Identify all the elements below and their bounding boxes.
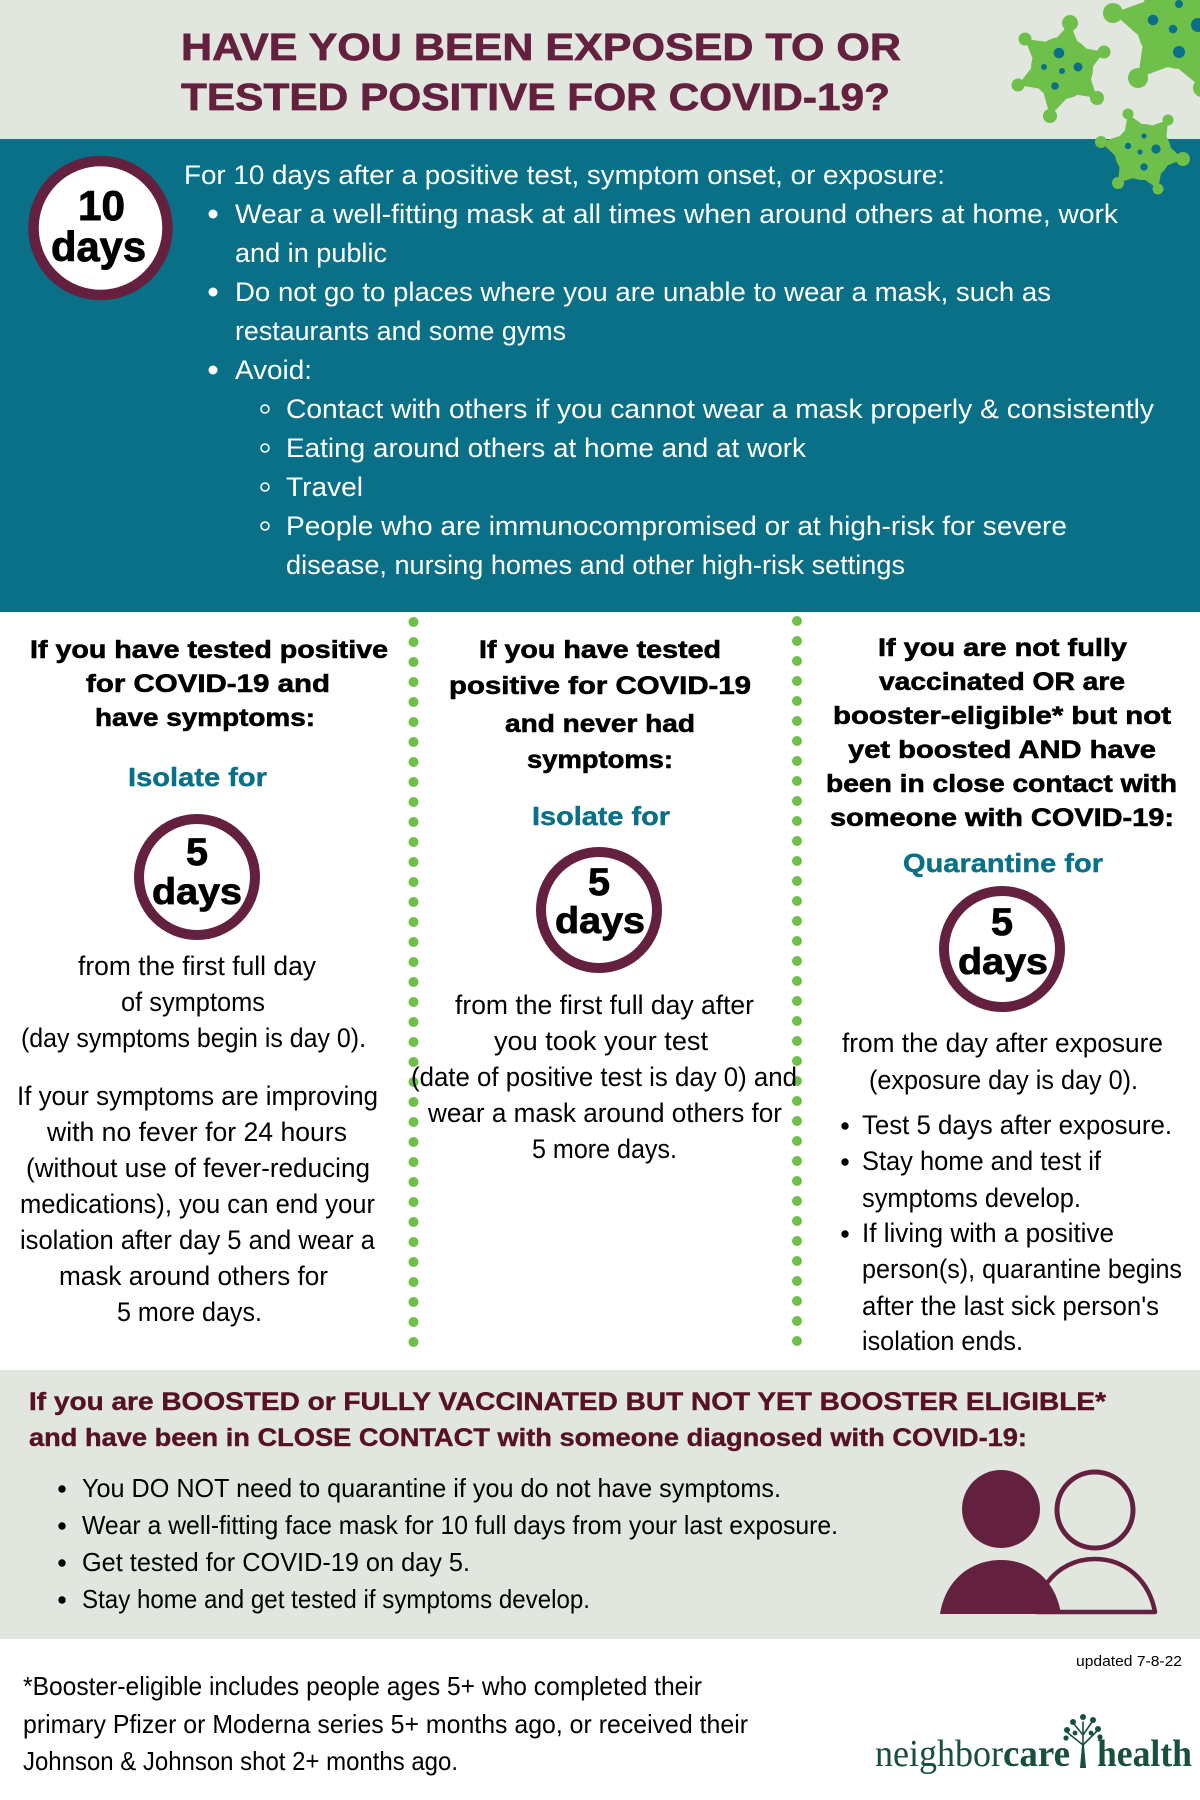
heading: vaccinated OR are bbox=[879, 668, 1125, 696]
text block: (day symptoms begin is day 0). bbox=[21, 1023, 366, 1053]
bullet list: Get tested for COVID-19 on day 5. bbox=[82, 1547, 470, 1577]
text block: from the first full day after bbox=[455, 990, 754, 1020]
heading: If you are BOOSTED or FULLY VACCINATED BUT NOT YET BOOSTER ELIGIBLE* bbox=[29, 1388, 1106, 1416]
panel: tested positive with symptoms bbox=[17, 636, 388, 1327]
text block bbox=[841, 1028, 1182, 1356]
text block: If your symptoms are improving bbox=[17, 1081, 378, 1111]
text block: of symptoms bbox=[121, 987, 265, 1017]
header panel bbox=[0, 0, 1200, 139]
badge: 5 days: days bbox=[152, 871, 242, 912]
title: HAVE YOU BEEN EXPOSED TO OR bbox=[181, 27, 901, 69]
text block: wear a mask around others for bbox=[427, 1098, 782, 1128]
heading bbox=[449, 636, 751, 774]
text block: you took your test bbox=[494, 1026, 708, 1056]
logo: neighborcare health: health bbox=[1097, 1733, 1192, 1775]
guidance list: and in public bbox=[235, 238, 387, 268]
text block: symptoms develop. bbox=[862, 1183, 1081, 1213]
panel: 10 days guidance bbox=[0, 139, 1200, 612]
title bbox=[181, 27, 901, 119]
heading: been in close contact with bbox=[826, 770, 1177, 798]
icon: virus large cropped bbox=[1103, 0, 1200, 97]
text block: (exposure day is day 0). bbox=[869, 1065, 1138, 1095]
heading: have symptoms: bbox=[95, 704, 315, 732]
heading: for COVID-19 and bbox=[86, 670, 330, 698]
panel: close contact not fully vaccinated bbox=[826, 634, 1182, 1356]
badge: 5 days bbox=[944, 891, 1060, 1007]
bullet list: Wear a well-fitting face mask for 10 full days from your last exposure. bbox=[82, 1510, 838, 1540]
footnote bbox=[23, 1671, 748, 1776]
heading: If you have tested positive bbox=[30, 636, 388, 664]
guidance list: Do not go to places where you are unable to wear a mask, such as bbox=[235, 277, 1051, 307]
text block: mask around others for bbox=[59, 1261, 328, 1291]
guidance list: restaurants and some gyms bbox=[235, 316, 566, 346]
title: TESTED POSITIVE FOR COVID-19? bbox=[181, 77, 890, 119]
text block: 5 more days. bbox=[117, 1297, 262, 1327]
icon: two people bbox=[940, 1470, 1155, 1614]
text block bbox=[17, 951, 378, 1327]
heading: symptoms: bbox=[527, 746, 673, 774]
panel: tested positive never had symptoms bbox=[411, 636, 797, 1164]
icon: virus lower bbox=[1095, 108, 1190, 194]
text block bbox=[411, 990, 797, 1164]
guidance list: People who are immunocompromised or at high-risk for severe bbox=[286, 511, 1067, 541]
guidance list: Wear a well-fitting mask at all times when around others at home, work bbox=[235, 199, 1119, 229]
badge: 10 days: 10 bbox=[78, 182, 125, 229]
text block: If living with a positive bbox=[862, 1218, 1114, 1248]
icon: virus small left bbox=[1012, 15, 1110, 123]
text block: from the first full day bbox=[78, 951, 316, 981]
badge: 5 days: 5 bbox=[588, 861, 610, 904]
footnote: Johnson & Johnson shot 2+ months ago. bbox=[23, 1746, 458, 1776]
text block: after the last sick person's bbox=[862, 1291, 1159, 1321]
guidance list bbox=[184, 160, 1155, 580]
text block: (date of positive test is day 0) and bbox=[411, 1062, 797, 1092]
heading bbox=[826, 634, 1177, 832]
heading: positive for COVID-19 bbox=[449, 672, 751, 700]
badge: 10 days: days bbox=[51, 223, 146, 270]
text block: from the day after exposure bbox=[842, 1028, 1163, 1058]
logo: neighborcare health: neighbor bbox=[875, 1733, 1003, 1775]
guidance list: Travel bbox=[286, 472, 363, 502]
label: isolate for: Isolate for bbox=[532, 801, 670, 831]
text block: medications), you can end your bbox=[20, 1189, 375, 1219]
heading bbox=[30, 636, 388, 732]
bullet list: You DO NOT need to quarantine if you do not have symptoms. bbox=[82, 1473, 781, 1503]
footnote: *Booster-eligible includes people ages 5+ who completed their bbox=[23, 1671, 702, 1701]
badge: 5 days bbox=[541, 852, 657, 968]
logo: neighborcare health: care bbox=[1003, 1733, 1070, 1775]
logo: neighborcare health bbox=[875, 1714, 1192, 1775]
heading: booster-eligible* but not bbox=[833, 702, 1172, 730]
text block: isolation after day 5 and wear a bbox=[20, 1225, 376, 1255]
guidance list: For 10 days after a positive test, symptom onset, or exposure: bbox=[184, 160, 945, 190]
guidance list: disease, nursing homes and other high-risk settings bbox=[286, 550, 905, 580]
footnote: primary Pfizer or Moderna series 5+ months ago, or received their bbox=[23, 1709, 748, 1739]
text block: person(s), quarantine begins bbox=[862, 1254, 1182, 1284]
heading: yet boosted AND have bbox=[848, 736, 1156, 764]
guidance list: Eating around others at home and at work bbox=[286, 433, 807, 463]
badge: 5 days bbox=[139, 819, 255, 935]
heading: If you have tested bbox=[479, 636, 721, 664]
bullet list bbox=[58, 1473, 838, 1614]
badge: 5 days: days bbox=[555, 900, 645, 941]
text block: 5 more days. bbox=[532, 1134, 677, 1164]
bullet list: Stay home and get tested if symptoms develop. bbox=[82, 1584, 590, 1614]
heading: If you are not fully bbox=[878, 634, 1127, 662]
guidance list: Avoid: bbox=[235, 355, 312, 385]
heading: someone with COVID-19: bbox=[830, 804, 1174, 832]
heading bbox=[29, 1388, 1106, 1452]
text block: with no fever for 24 hours bbox=[46, 1117, 347, 1147]
text block: Stay home and test if bbox=[862, 1146, 1101, 1176]
text block: Test 5 days after exposure. bbox=[862, 1110, 1172, 1140]
heading: and never had bbox=[505, 710, 695, 738]
label: quarantine for: Quarantine for bbox=[903, 848, 1103, 878]
badge: 5 days: days bbox=[958, 941, 1048, 982]
badge: 10 days bbox=[34, 161, 168, 295]
badge: 5 days: 5 bbox=[186, 831, 208, 874]
label: isolate for: Isolate for bbox=[128, 762, 267, 792]
guidance list: Contact with others if you cannot wear a mask properly & consistently bbox=[286, 394, 1155, 424]
badge: 5 days: 5 bbox=[991, 901, 1013, 944]
heading: and have been in CLOSE CONTACT with someone diagnosed with COVID-19: bbox=[29, 1424, 1027, 1452]
text block: (without use of fever-reducing bbox=[26, 1153, 370, 1183]
text block: isolation ends. bbox=[862, 1326, 1023, 1356]
update date: updated 7-8-22 bbox=[1076, 1653, 1182, 1670]
panel: boosted close contact bbox=[0, 1370, 1200, 1639]
